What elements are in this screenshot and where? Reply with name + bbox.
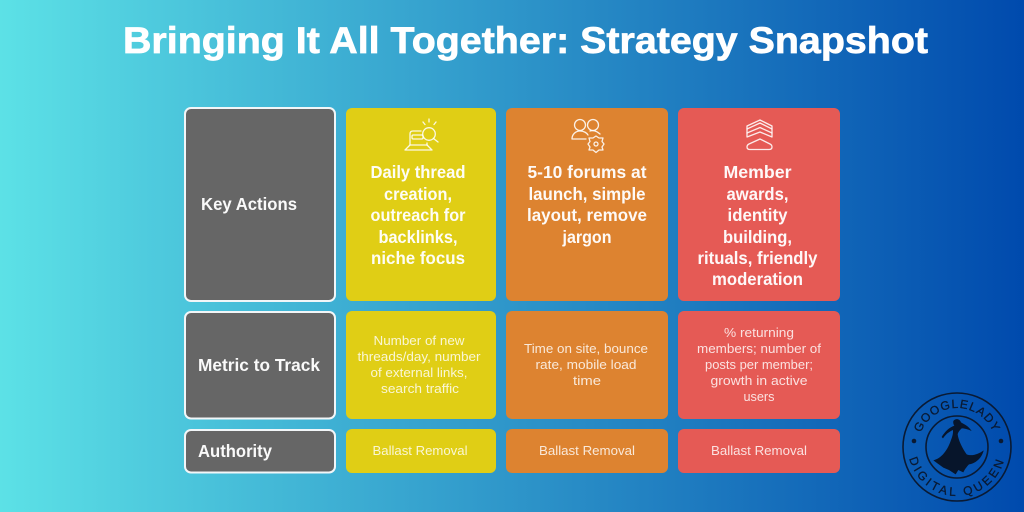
logo badge: DIGITAL QUEEN	[909, 456, 1004, 496]
icon: stacked chevrons	[747, 120, 772, 150]
panel: red metric: members; number of	[697, 341, 821, 356]
panel: yellow key actions	[346, 108, 496, 301]
panel: red key actions: moderation	[712, 269, 803, 289]
panel: key actions label: Key Actions	[201, 194, 297, 214]
panel: red metric: users	[744, 389, 775, 404]
panel: orange key actions: 5-10 forums at	[528, 162, 647, 182]
icon: dancing queen silhouette	[933, 419, 984, 474]
panel: red authority: Ballast Removal	[711, 443, 807, 458]
panel: orange key actions: jargon	[562, 227, 612, 247]
panel: red key actions: awards,	[726, 184, 788, 204]
panel: yellow key actions: creation,	[384, 184, 452, 204]
logo badge: GOOGLELADY	[914, 400, 1000, 431]
panel: authority label: Authority	[198, 441, 272, 461]
panel: orange key actions: layout, remove	[527, 205, 647, 225]
panel: yellow key actions: backlinks,	[378, 227, 458, 247]
panel: orange metric	[506, 311, 668, 419]
panel: metric to track label	[185, 312, 335, 418]
panel: metric to track label: Metric to Track	[198, 355, 320, 375]
panel: authority label	[185, 430, 335, 472]
icon: people with gear	[572, 120, 604, 152]
panel: red authority	[678, 429, 840, 473]
panel: orange key actions: launch, simple	[528, 184, 646, 204]
title: Bringing It All Together: Strategy Snapshot	[123, 20, 928, 61]
panel: yellow metric	[346, 311, 496, 419]
panel: orange metric: Time on site, bounce	[524, 341, 648, 356]
panel: orange metric: rate, mobile load	[536, 357, 636, 372]
panel: red key actions: rituals, friendly	[698, 248, 818, 268]
panel: yellow key actions: outreach for	[370, 205, 466, 225]
panel: yellow authority	[346, 429, 496, 473]
panel: red metric: % returning	[724, 325, 794, 340]
panel: key actions label	[185, 108, 335, 301]
panel: red metric	[678, 311, 840, 419]
panel: red key actions	[678, 108, 840, 301]
panel: yellow key actions: Daily thread	[370, 162, 466, 182]
panel: orange metric: time	[573, 373, 601, 388]
panel: red key actions: Member	[724, 162, 792, 182]
panel: yellow metric: of external links,	[370, 365, 468, 380]
panel: yellow authority: Ballast Removal	[372, 443, 468, 458]
panel: yellow key actions: niche focus	[371, 248, 465, 268]
panel: orange authority: Ballast Removal	[539, 443, 635, 458]
logo badge	[902, 392, 1012, 502]
panel: red metric: growth in active	[710, 373, 808, 388]
panel: red key actions: building,	[723, 227, 792, 247]
panel: yellow metric: threads/day, number	[358, 349, 481, 364]
panel: orange key actions	[506, 108, 668, 301]
panel: orange authority	[506, 429, 668, 473]
icon: laptop with magnifier	[405, 119, 438, 150]
panel: red metric: posts per member;	[705, 357, 813, 372]
panel: yellow metric: Number of new	[374, 333, 465, 348]
panel: red key actions: identity	[728, 205, 788, 225]
panel: yellow metric: search traffic	[381, 381, 460, 396]
